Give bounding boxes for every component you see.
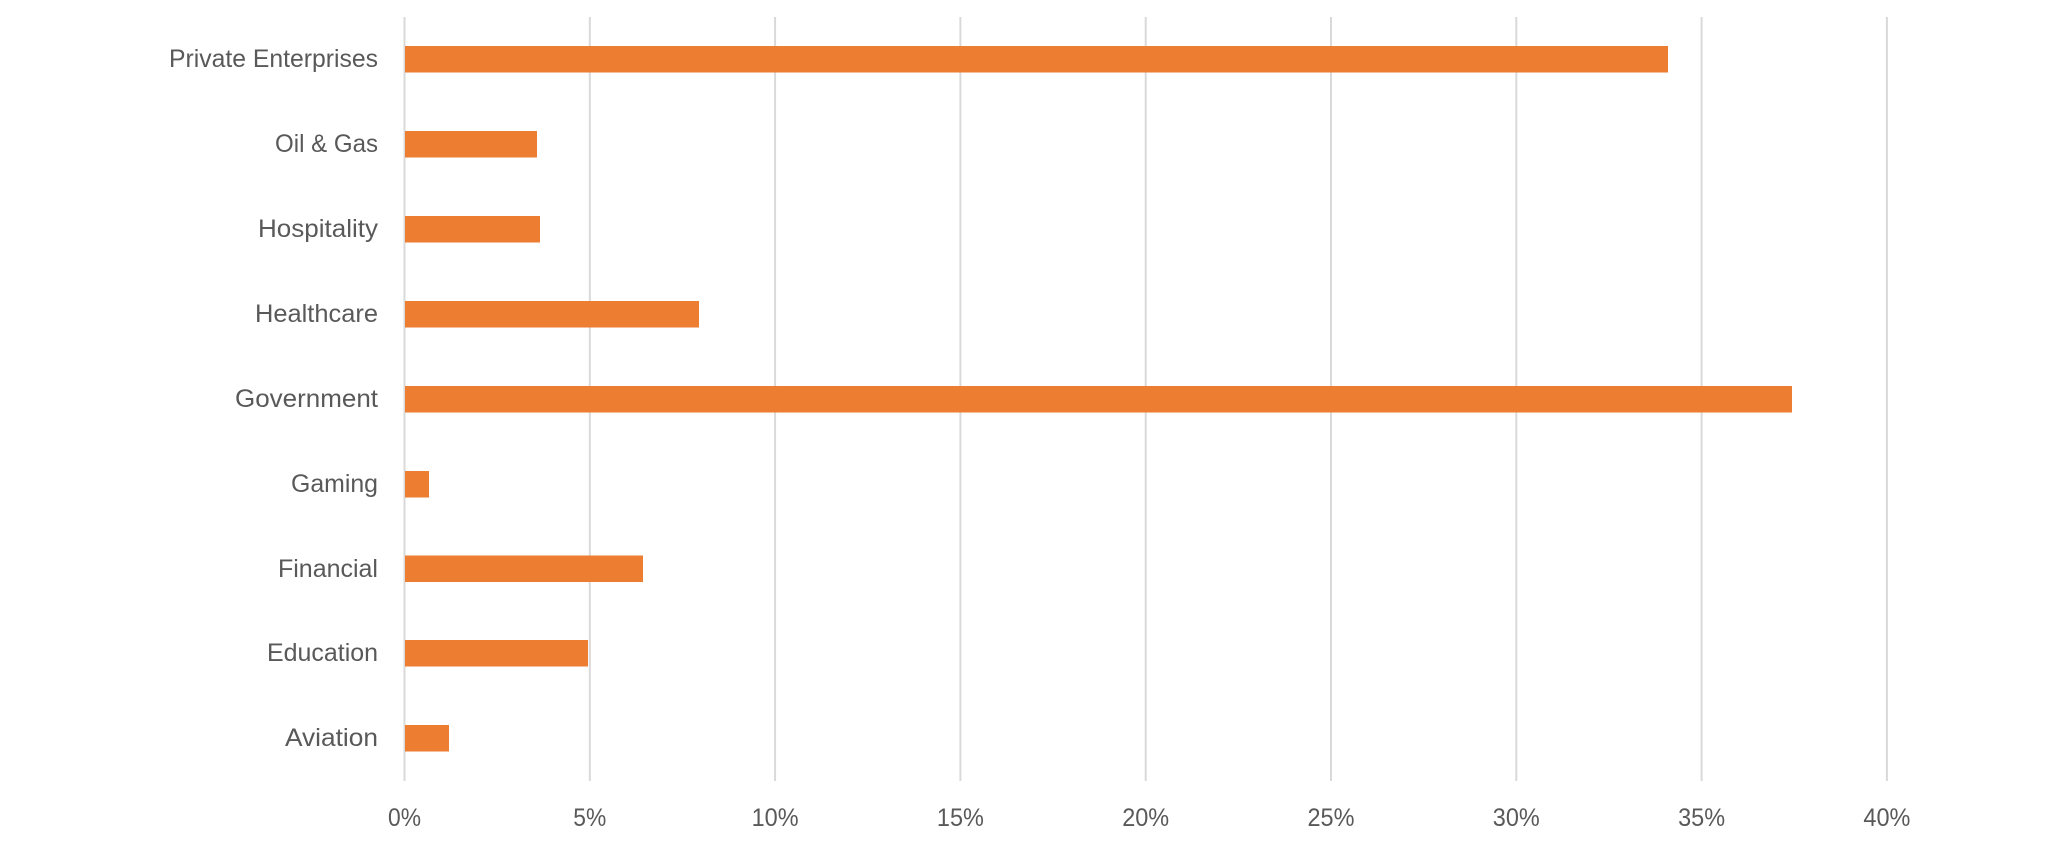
value axis labels: 40%	[1863, 804, 1910, 832]
category axis labels	[169, 45, 379, 752]
category axis labels: Oil & Gas	[275, 130, 378, 158]
category axis labels: Hospitality	[258, 215, 379, 243]
category axis labels: Private Enterprises	[169, 45, 378, 73]
value axis labels: 15%	[937, 804, 984, 832]
category axis labels: Financial	[278, 555, 378, 583]
data bars	[405, 46, 1792, 752]
category axis labels: Aviation	[285, 724, 378, 752]
value axis labels: 20%	[1122, 804, 1169, 832]
value axis labels: 25%	[1308, 804, 1354, 832]
value axis labels	[388, 804, 1910, 832]
value axis labels: 35%	[1678, 804, 1725, 832]
value axis labels: 5%	[573, 804, 606, 832]
category axis labels: Gaming	[291, 470, 378, 498]
category axis labels: Government	[235, 385, 378, 413]
category axis labels: Healthcare	[255, 300, 378, 328]
category axis labels: Education	[267, 639, 378, 667]
value axis labels: 10%	[752, 804, 799, 832]
value axis labels: 30%	[1493, 804, 1540, 832]
value axis labels: 0%	[388, 804, 421, 832]
